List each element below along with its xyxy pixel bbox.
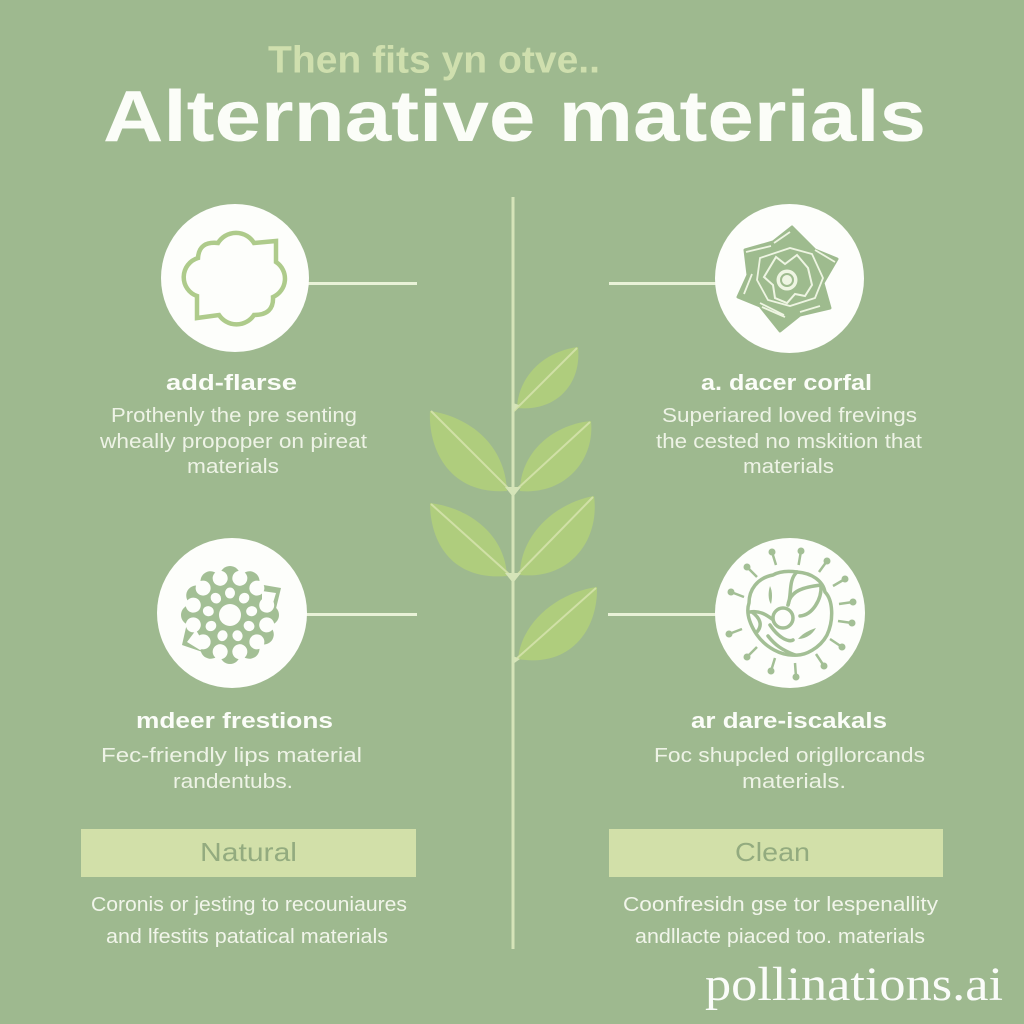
description: the cested no mskition that xyxy=(656,431,922,453)
label bar xyxy=(81,829,416,877)
label bar: Natural xyxy=(200,837,297,867)
description: Superiared loved frevings xyxy=(662,405,917,427)
description: materials. xyxy=(742,771,846,793)
heading: ar dare-iscakals xyxy=(691,708,887,733)
footer text: Coronis or jesting to recouniaures xyxy=(91,894,407,916)
panel: clean xyxy=(609,829,943,948)
panel: middle right item xyxy=(608,538,925,793)
description: Foc shupcled origllorcands xyxy=(654,745,925,767)
leaf upper left xyxy=(430,411,510,491)
description: Prothenly the pre senting xyxy=(111,405,357,427)
heading: mdeer frestions xyxy=(136,708,333,733)
description xyxy=(654,745,925,793)
icon: radiating flower xyxy=(715,538,865,688)
footer text xyxy=(623,894,938,948)
connector line xyxy=(300,613,417,616)
stem joints xyxy=(505,403,521,664)
description xyxy=(656,405,922,478)
description xyxy=(101,745,362,793)
title: Alternative materials xyxy=(103,77,926,157)
stem xyxy=(512,197,514,949)
description: randentubs. xyxy=(173,771,293,793)
description xyxy=(99,405,368,478)
footer text xyxy=(91,894,407,948)
connector line xyxy=(609,282,724,285)
leaf lower left xyxy=(430,503,510,576)
heading: add-flarse xyxy=(166,370,297,395)
connector line xyxy=(300,282,417,285)
panel: natural xyxy=(81,829,416,948)
footer text: andllacte piaced too. materials xyxy=(635,926,925,948)
description: materials xyxy=(187,456,279,478)
icon: lace flower xyxy=(157,538,307,688)
label bar: Clean xyxy=(735,837,810,867)
connector line xyxy=(608,613,723,616)
description: Fec-friendly lips material xyxy=(101,745,362,767)
description: wheally propoper on pireat xyxy=(99,431,368,453)
panel: top left item xyxy=(99,204,417,478)
heading: a. dacer corfal xyxy=(701,370,872,395)
icon: layered star flower xyxy=(715,204,864,353)
description: materials xyxy=(743,456,834,478)
leaf upper right xyxy=(516,421,591,491)
footer text: and lfestits patatical materials xyxy=(106,926,388,948)
icon: scalloped badge xyxy=(161,204,309,352)
subtitle: Then fits yn otve.. xyxy=(268,40,600,82)
leaf bottom right xyxy=(515,587,597,660)
panel: middle left item xyxy=(101,538,417,793)
central plant with stem and leaves xyxy=(430,197,597,949)
leaf top right xyxy=(514,347,578,411)
watermark: pollinations.ai xyxy=(705,958,1003,1011)
label bar xyxy=(609,829,943,877)
leaf lower right xyxy=(516,496,595,576)
footer text: Coonfresidn gse tor lespenallity xyxy=(623,894,938,916)
panel: top right item xyxy=(609,204,922,478)
